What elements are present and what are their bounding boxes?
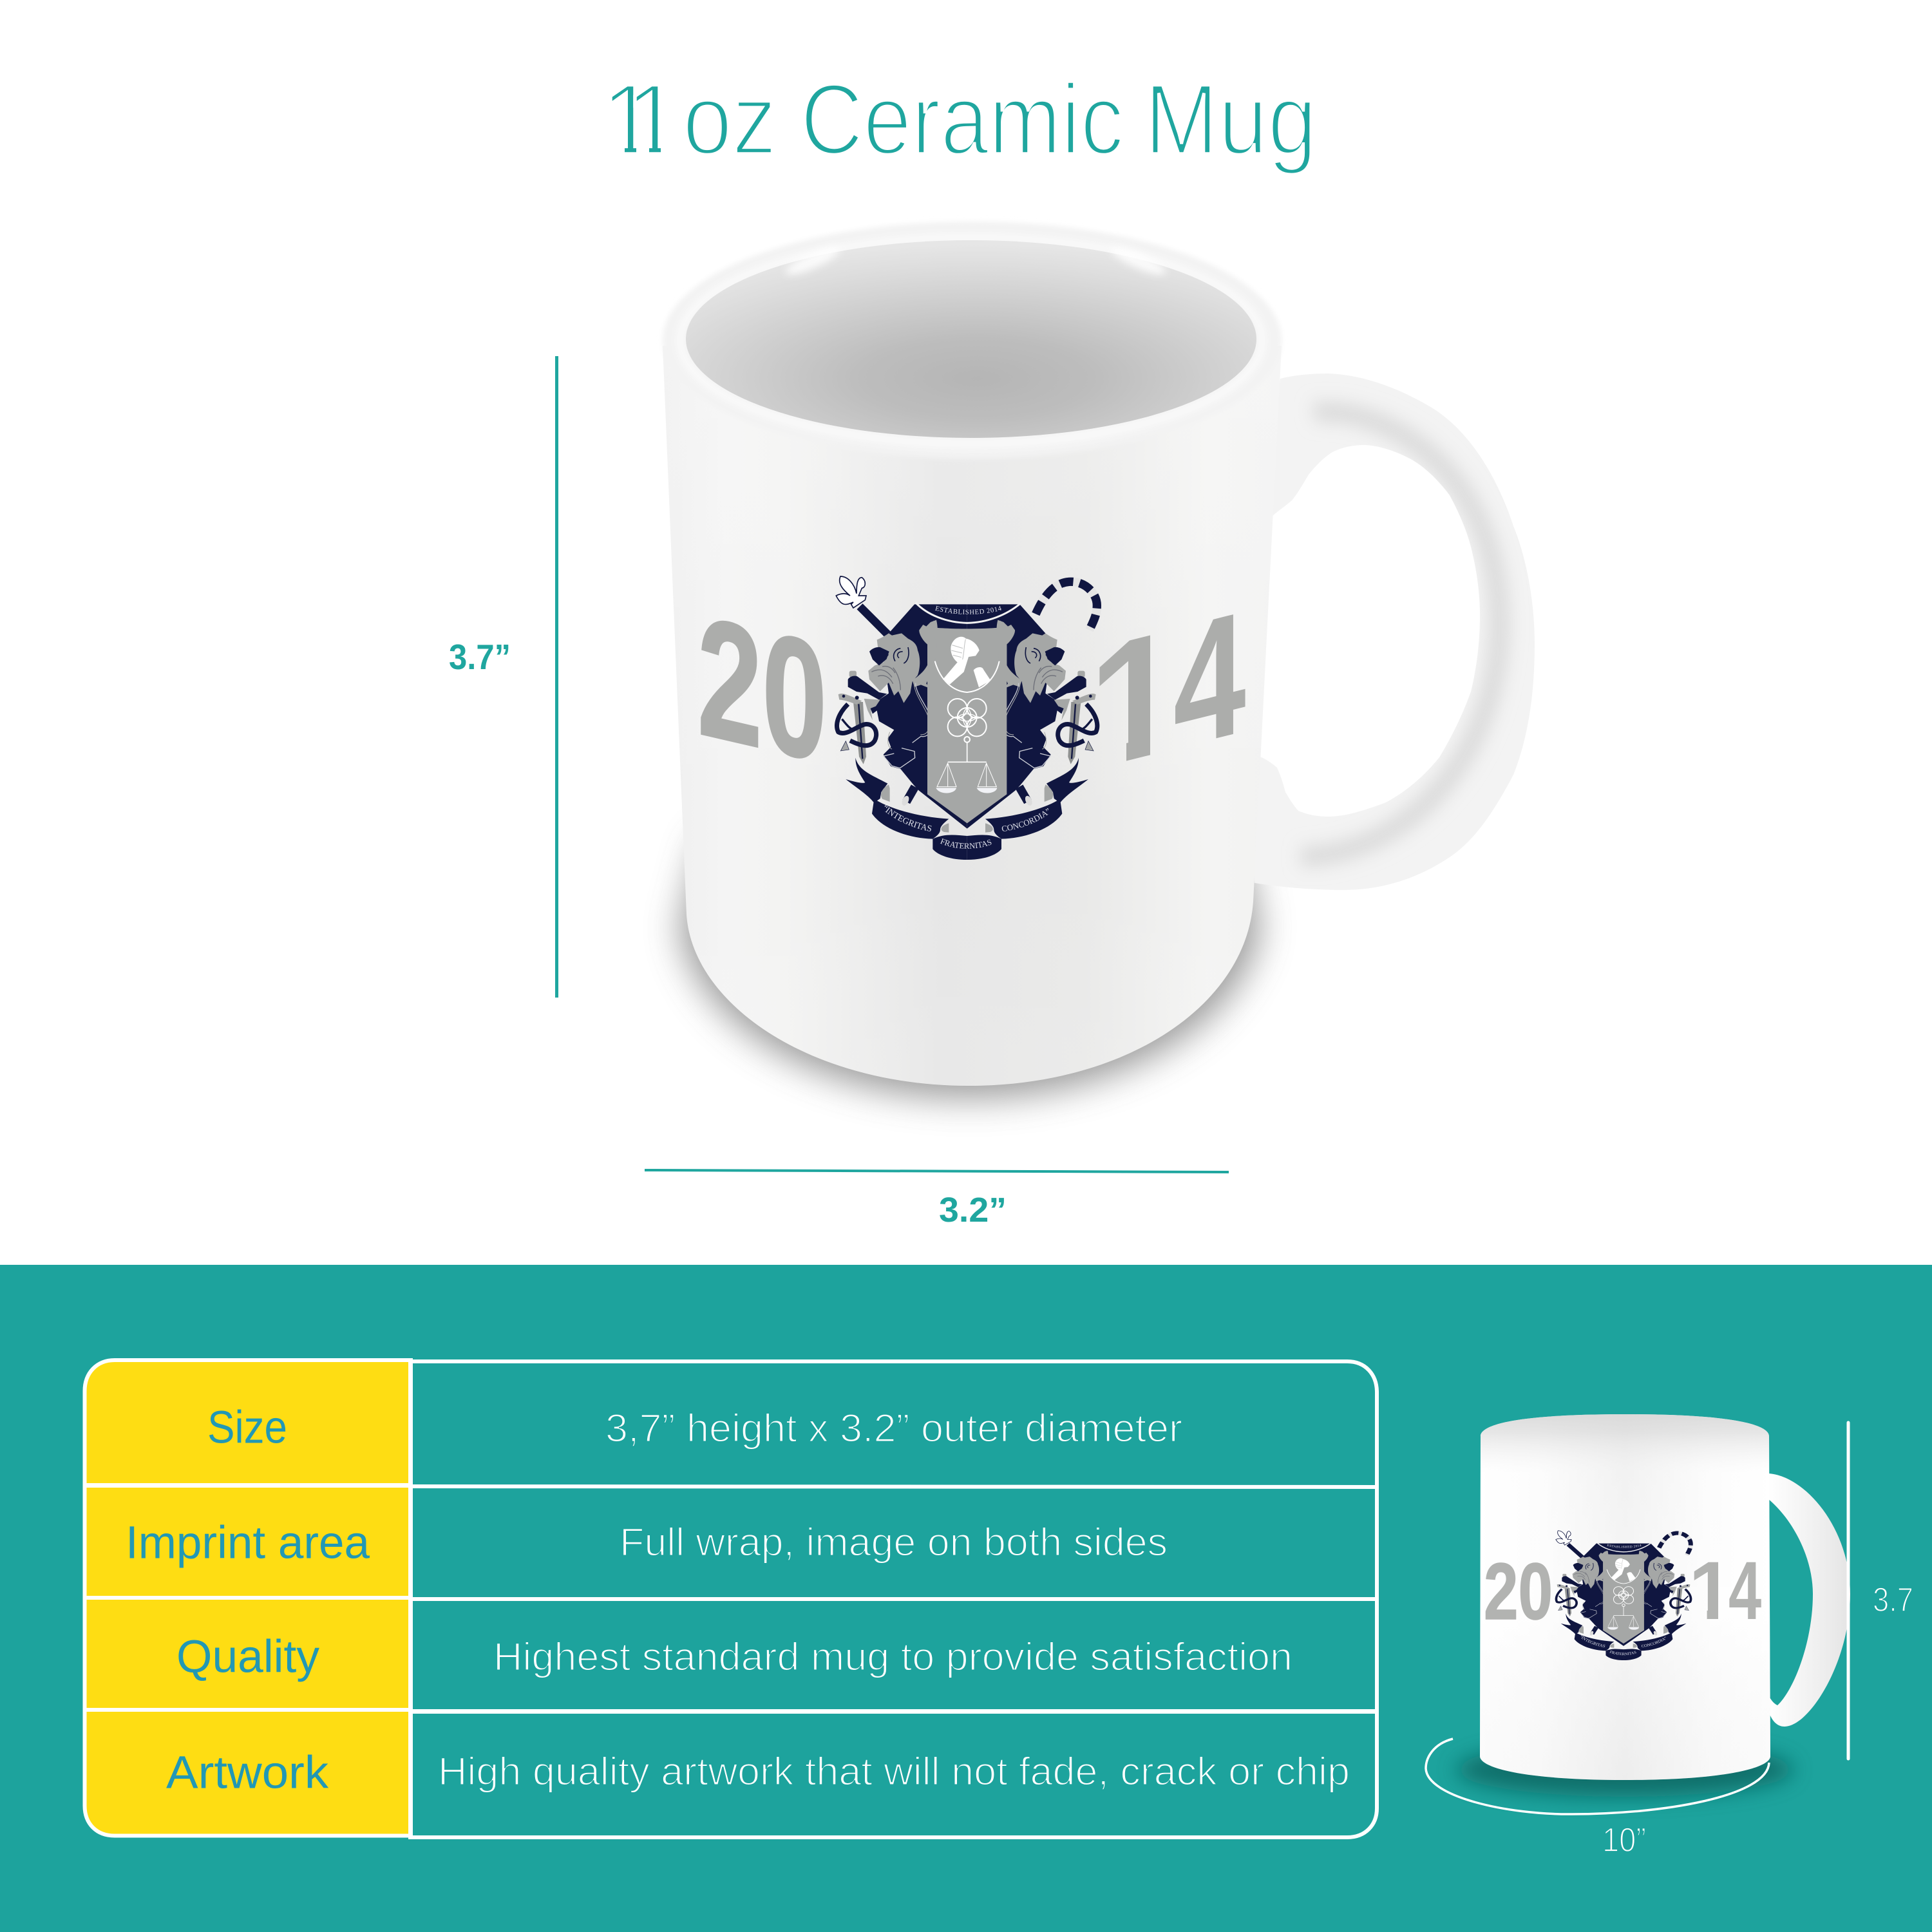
small mug shadow bbox=[1456, 1743, 1794, 1797]
row: size: Size bbox=[207, 1403, 287, 1453]
height label: 3.7” bbox=[449, 637, 511, 677]
year digits 14: 4 bbox=[1173, 574, 1246, 786]
teal panel bbox=[0, 1265, 1932, 1932]
small crest emblem bbox=[1555, 1530, 1693, 1660]
width label: 3.2” bbox=[939, 1191, 1007, 1229]
small digits 14 bbox=[1694, 1562, 1761, 1619]
specification table bbox=[85, 1358, 1377, 1839]
row: imprint area: Full wrap, image on both sides bbox=[620, 1520, 1168, 1564]
crest emblem: ESTABLISHED 2014 bbox=[935, 605, 1001, 614]
mug handle bbox=[1255, 374, 1535, 890]
row: quality: Highest standard mug to provide satisfaction bbox=[493, 1634, 1293, 1678]
crest emblem: FRATERNITAS bbox=[940, 838, 992, 849]
mug rim bbox=[663, 222, 1282, 459]
mug body bbox=[663, 346, 1282, 1086]
crest emblem: CONCORDIA” bbox=[1002, 808, 1048, 831]
crest emblem: “INTEGRITAS bbox=[885, 805, 931, 831]
circumference arc bbox=[1426, 1739, 1769, 1814]
small digits 20: 20 bbox=[1484, 1548, 1553, 1636]
row: imprint area bbox=[126, 1517, 1168, 1569]
crest emblem bbox=[835, 576, 1101, 860]
title bbox=[612, 82, 1310, 173]
small mug height label: 3.7 bbox=[1873, 1581, 1913, 1619]
row: artwork bbox=[166, 1748, 1350, 1798]
row: imprint area: Imprint area bbox=[126, 1517, 370, 1569]
small digits 14: 4 bbox=[1728, 1544, 1761, 1637]
small digits 14: 1 bbox=[1689, 1545, 1734, 1637]
title: oz bbox=[683, 64, 777, 176]
title: 1 bbox=[601, 64, 657, 176]
small mug body bbox=[1480, 1414, 1770, 1780]
circumference label: 10” bbox=[1602, 1821, 1646, 1859]
small crest emblem: ESTABLISHED 2014 bbox=[1607, 1544, 1641, 1548]
mug interior bbox=[686, 240, 1256, 438]
row: artwork: Artwork bbox=[166, 1748, 329, 1798]
mug shadow bbox=[680, 837, 1260, 1097]
title: Mug bbox=[1144, 64, 1317, 176]
year digits 20: 20 bbox=[697, 581, 827, 799]
row: size: 3,7” height x 3.2” outer diameter bbox=[605, 1406, 1182, 1450]
small crest emblem: CONCORDIA” bbox=[1642, 1637, 1665, 1647]
yellow label column bbox=[86, 1361, 408, 1835]
title: 1 bbox=[625, 64, 681, 176]
row: size bbox=[207, 1403, 1182, 1453]
small crest emblem: “INTEGRITAS bbox=[1580, 1635, 1605, 1647]
small mug side view bbox=[1452, 1414, 1850, 1807]
small mug handle bbox=[1768, 1473, 1850, 1727]
row: quality: Quality bbox=[176, 1632, 319, 1682]
year digits 14: 1 bbox=[1088, 590, 1184, 808]
row: artwork: High quality artwork that will not fade, crack or chip bbox=[438, 1749, 1350, 1793]
height dimension line bbox=[555, 356, 558, 998]
rim highlights bbox=[783, 242, 1168, 279]
table frame bbox=[85, 1360, 410, 1835]
width dimension line bbox=[645, 1169, 1229, 1173]
small crest emblem: FRATERNITAS bbox=[1609, 1650, 1636, 1655]
title: Ceramic bbox=[800, 64, 1124, 176]
row: quality bbox=[176, 1632, 1293, 1682]
small mug height line bbox=[1847, 1423, 1850, 1759]
main mug with crest bbox=[659, 223, 1535, 1121]
year digits 14 bbox=[1100, 614, 1245, 761]
